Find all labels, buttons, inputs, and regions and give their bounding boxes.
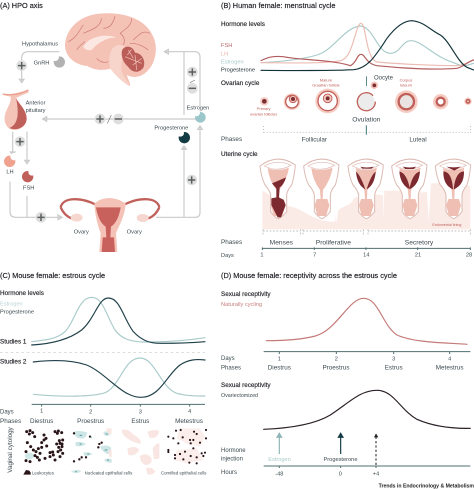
axis labels: days: 3 [139, 410, 142, 416]
axis labels and phases [268, 356, 464, 372]
label: Ovary right: Ovary [127, 229, 142, 235]
area: endometrial lining [262, 183, 470, 229]
axis: hours [264, 466, 470, 468]
icon: plus [16, 60, 27, 71]
label: Progesterone: Progesterone [154, 125, 188, 131]
axis labels: days: 1 [260, 253, 264, 259]
diagram: uterine cycle: Endometrial lining [432, 223, 461, 227]
arrow: ovary to estrogen [156, 126, 202, 217]
label: vaginal cytology: Vaginal cytology [7, 426, 14, 473]
phase labels [0, 418, 203, 425]
phase labels: Estrus [131, 418, 149, 425]
diagram: ovarian cycle follicles: ovarian follicles [250, 111, 277, 116]
phase labels: Diestrus [30, 418, 53, 425]
arrow: LH and FSH to ovary [10, 182, 62, 220]
phase bracket: follicular and luteal: Luteal [409, 136, 427, 143]
label: FSH: FSH [23, 185, 34, 191]
label: hormone injection [221, 448, 246, 463]
label: Phases: Phases [221, 136, 242, 143]
icon: slash [190, 80, 195, 83]
heading: sexual receptivity: Sexual receptivity [221, 291, 271, 298]
arrow: feedback to pituitary [43, 117, 200, 121]
cytology: estrus cornified cells [122, 430, 159, 475]
icon: slash [107, 115, 111, 123]
arrow: progesterone injection [338, 433, 343, 454]
label: studies 1: Studies 1 [0, 339, 27, 346]
axis labels and phases: 2 [335, 356, 338, 362]
panel: D receptivity across estrous cycle [221, 271, 474, 489]
label: Phases: Phases [221, 365, 241, 371]
panel: C mouse estrous cycle [0, 271, 206, 476]
legend: hormones: FSH [221, 43, 232, 49]
phase labels: Metestrus [175, 418, 203, 425]
axis labels: days: 2 [89, 410, 92, 416]
icon: uterus and ovaries [61, 198, 159, 252]
label: Phases: Phases [221, 239, 242, 246]
phase bracket: follicular and luteal [264, 125, 470, 143]
heading: sexual receptivity: Sexual receptivity [221, 382, 271, 389]
label: estrogen: Estrogen [268, 457, 291, 463]
legend: leukocytes [23, 470, 54, 476]
timeline: menstrual phases and days: Secretory [405, 240, 434, 247]
line chart: studies 1 [32, 297, 205, 345]
heading: HPO axis: (A) HPO axis [0, 1, 43, 10]
label: GnRH: GnRH [34, 61, 49, 67]
arrow: ovary to progesterone [182, 146, 186, 217]
axis: days [32, 404, 205, 407]
axis: days [264, 352, 470, 354]
axis labels: days: 21 [415, 253, 421, 259]
arrow: +4 hours dashed [374, 433, 378, 465]
icon: plus [187, 67, 198, 77]
arrow: hypothalamus to pituitary [19, 52, 59, 83]
timeline: menstrual phases and days [262, 240, 470, 250]
label: Anterior pituitary: Anterior [26, 101, 46, 107]
legend: nucleated epithelial cells [71, 470, 132, 476]
axis labels and phases: Metestrus [436, 365, 464, 372]
legend: hormones: LH [221, 51, 228, 57]
heading: hormone levels: Hormone levels [221, 21, 265, 28]
label: Days: Days [221, 253, 234, 259]
legend: estrogen: Estrogen [0, 302, 23, 308]
axis labels and phases: Estrus [385, 365, 403, 372]
label: Ovary left: Ovary [74, 229, 89, 235]
line chart: hormone curves [261, 21, 474, 71]
axis labels and phases: 4 [448, 356, 451, 362]
label: naturally cycling: Naturally cycling [221, 302, 262, 308]
axis labels and phases: 1 [278, 356, 281, 362]
axis labels: days: 4 [188, 409, 191, 415]
legend: hormones: Progesterone [221, 67, 255, 73]
label: hormone injection: Hormone [221, 448, 246, 454]
icon: LH hormone [4, 153, 18, 167]
arrow: pituitary to LH [10, 132, 15, 155]
label: ovariectomized: Ovariectomized [221, 393, 258, 399]
heading: uterine cycle: Uterine cycle [221, 151, 258, 158]
icon: plus [15, 136, 25, 147]
axis labels and phases: Proestrus [322, 365, 350, 372]
icon: estrogen hormone [193, 109, 206, 123]
icon: minus [187, 83, 198, 94]
heading: hormone levels: Hormone levels [0, 290, 44, 297]
axis labels: days: 28 [466, 253, 472, 259]
heading: estrous cycle: (C) Mouse female: estrous cycle [0, 271, 105, 280]
label: LH: LH [6, 170, 14, 176]
label: hormone injection: injection [221, 457, 243, 463]
icon: progesterone hormone [177, 129, 190, 143]
diagram: ovarian cycle follicles: Graafian follicle [312, 83, 341, 88]
axis labels: days: 1 [40, 409, 43, 415]
label: pituitary: pituitary [26, 108, 46, 114]
diagram: ovarian cycle follicles: Primary [257, 106, 271, 111]
heading: menstrual cycle: (B) Human female: menstrual cycle [221, 1, 335, 10]
diagram: ovarian cycle follicles: luteum [400, 83, 413, 88]
icon: minus [113, 114, 124, 124]
cytology: metestrus [168, 428, 206, 463]
axis labels: days: Days [0, 410, 14, 416]
timeline: menstrual phases and days: Proliferative [316, 240, 351, 247]
heading: ovarian cycle: Ovarian cycle [221, 80, 260, 87]
icon: brain [65, 13, 156, 86]
axis labels: hours: -48 [275, 471, 283, 477]
label: Hours: Hours [221, 470, 237, 476]
arrow: estrogen injection [277, 433, 282, 454]
thickening lining [356, 167, 376, 189]
panel: B human menstrual cycle [221, 1, 474, 259]
label: Hypothalamus: Hypothalamus [22, 41, 58, 47]
legend: cornified epithelial cells: Cornified epithelial cells [161, 471, 206, 476]
axis labels: hours [275, 471, 379, 477]
arrow: pituitary to FSH [25, 132, 29, 164]
phase labels: Proestrus [77, 418, 104, 425]
icon: plus [36, 212, 46, 223]
axis labels: hours: +4 [373, 471, 379, 477]
legend: leukocytes: Leukocytes [32, 471, 54, 476]
arrow: estrogen feedback to brain [164, 49, 200, 115]
diagram: ovarian cycle follicles: Ovulation [352, 117, 381, 124]
axis labels: days: 14 [363, 253, 369, 259]
phase labels: Phases [0, 418, 21, 425]
timeline: menstrual phases and days: Menses [270, 240, 294, 247]
heading: receptivity: (D) Mouse female: receptivity across the estrous cycle [221, 271, 397, 280]
diagram: ovarian cycle follicles: Oocyte [374, 75, 394, 81]
diagram: ovarian cycle follicles [250, 75, 472, 124]
line chart: studies 2 [33, 358, 205, 397]
label: studies 2: Studies 2 [0, 359, 27, 366]
line chart: naturally cycling [266, 298, 467, 344]
axis labels: hours: 0 [339, 471, 342, 477]
label: Estrogen: Estrogen [187, 105, 209, 111]
label: progesterone: Progesterone [324, 457, 357, 463]
axis labels and phases: 3 [392, 356, 395, 362]
icon: plus [95, 114, 105, 124]
icon: FSH hormone [22, 168, 36, 182]
diagram: uterine cycle [260, 159, 471, 236]
axis labels: days [260, 253, 472, 259]
diagram: ovarian cycle follicles: Mature [320, 77, 333, 82]
icon: plus [186, 175, 197, 185]
cytology: proestrus nucleated cells [74, 428, 112, 463]
axis labels: days [0, 409, 191, 416]
diagram: ovarian cycle follicles: Corpus [400, 77, 412, 82]
icon: GnRH hormone [51, 53, 65, 68]
icon: anterior pituitary [3, 90, 29, 130]
line chart: ovariectomized [264, 390, 470, 429]
cytology: diestrus leukocytes [25, 431, 63, 462]
menses blood [271, 177, 286, 217]
panel: A HPO axis [0, 1, 209, 252]
legend: hormones: Estrogen [221, 60, 244, 66]
axis labels: days: 7 [313, 253, 316, 259]
phase bracket: follicular and luteal: Follicular [302, 136, 327, 143]
legend: progesterone: Progesterone [0, 310, 34, 316]
legend: hormones [221, 43, 255, 73]
legend: nucleated epithelial cells: Nucleated epithelial cells [85, 471, 132, 476]
axis labels and phases: Diestrus [268, 365, 291, 372]
label: Days: Days [221, 356, 235, 362]
